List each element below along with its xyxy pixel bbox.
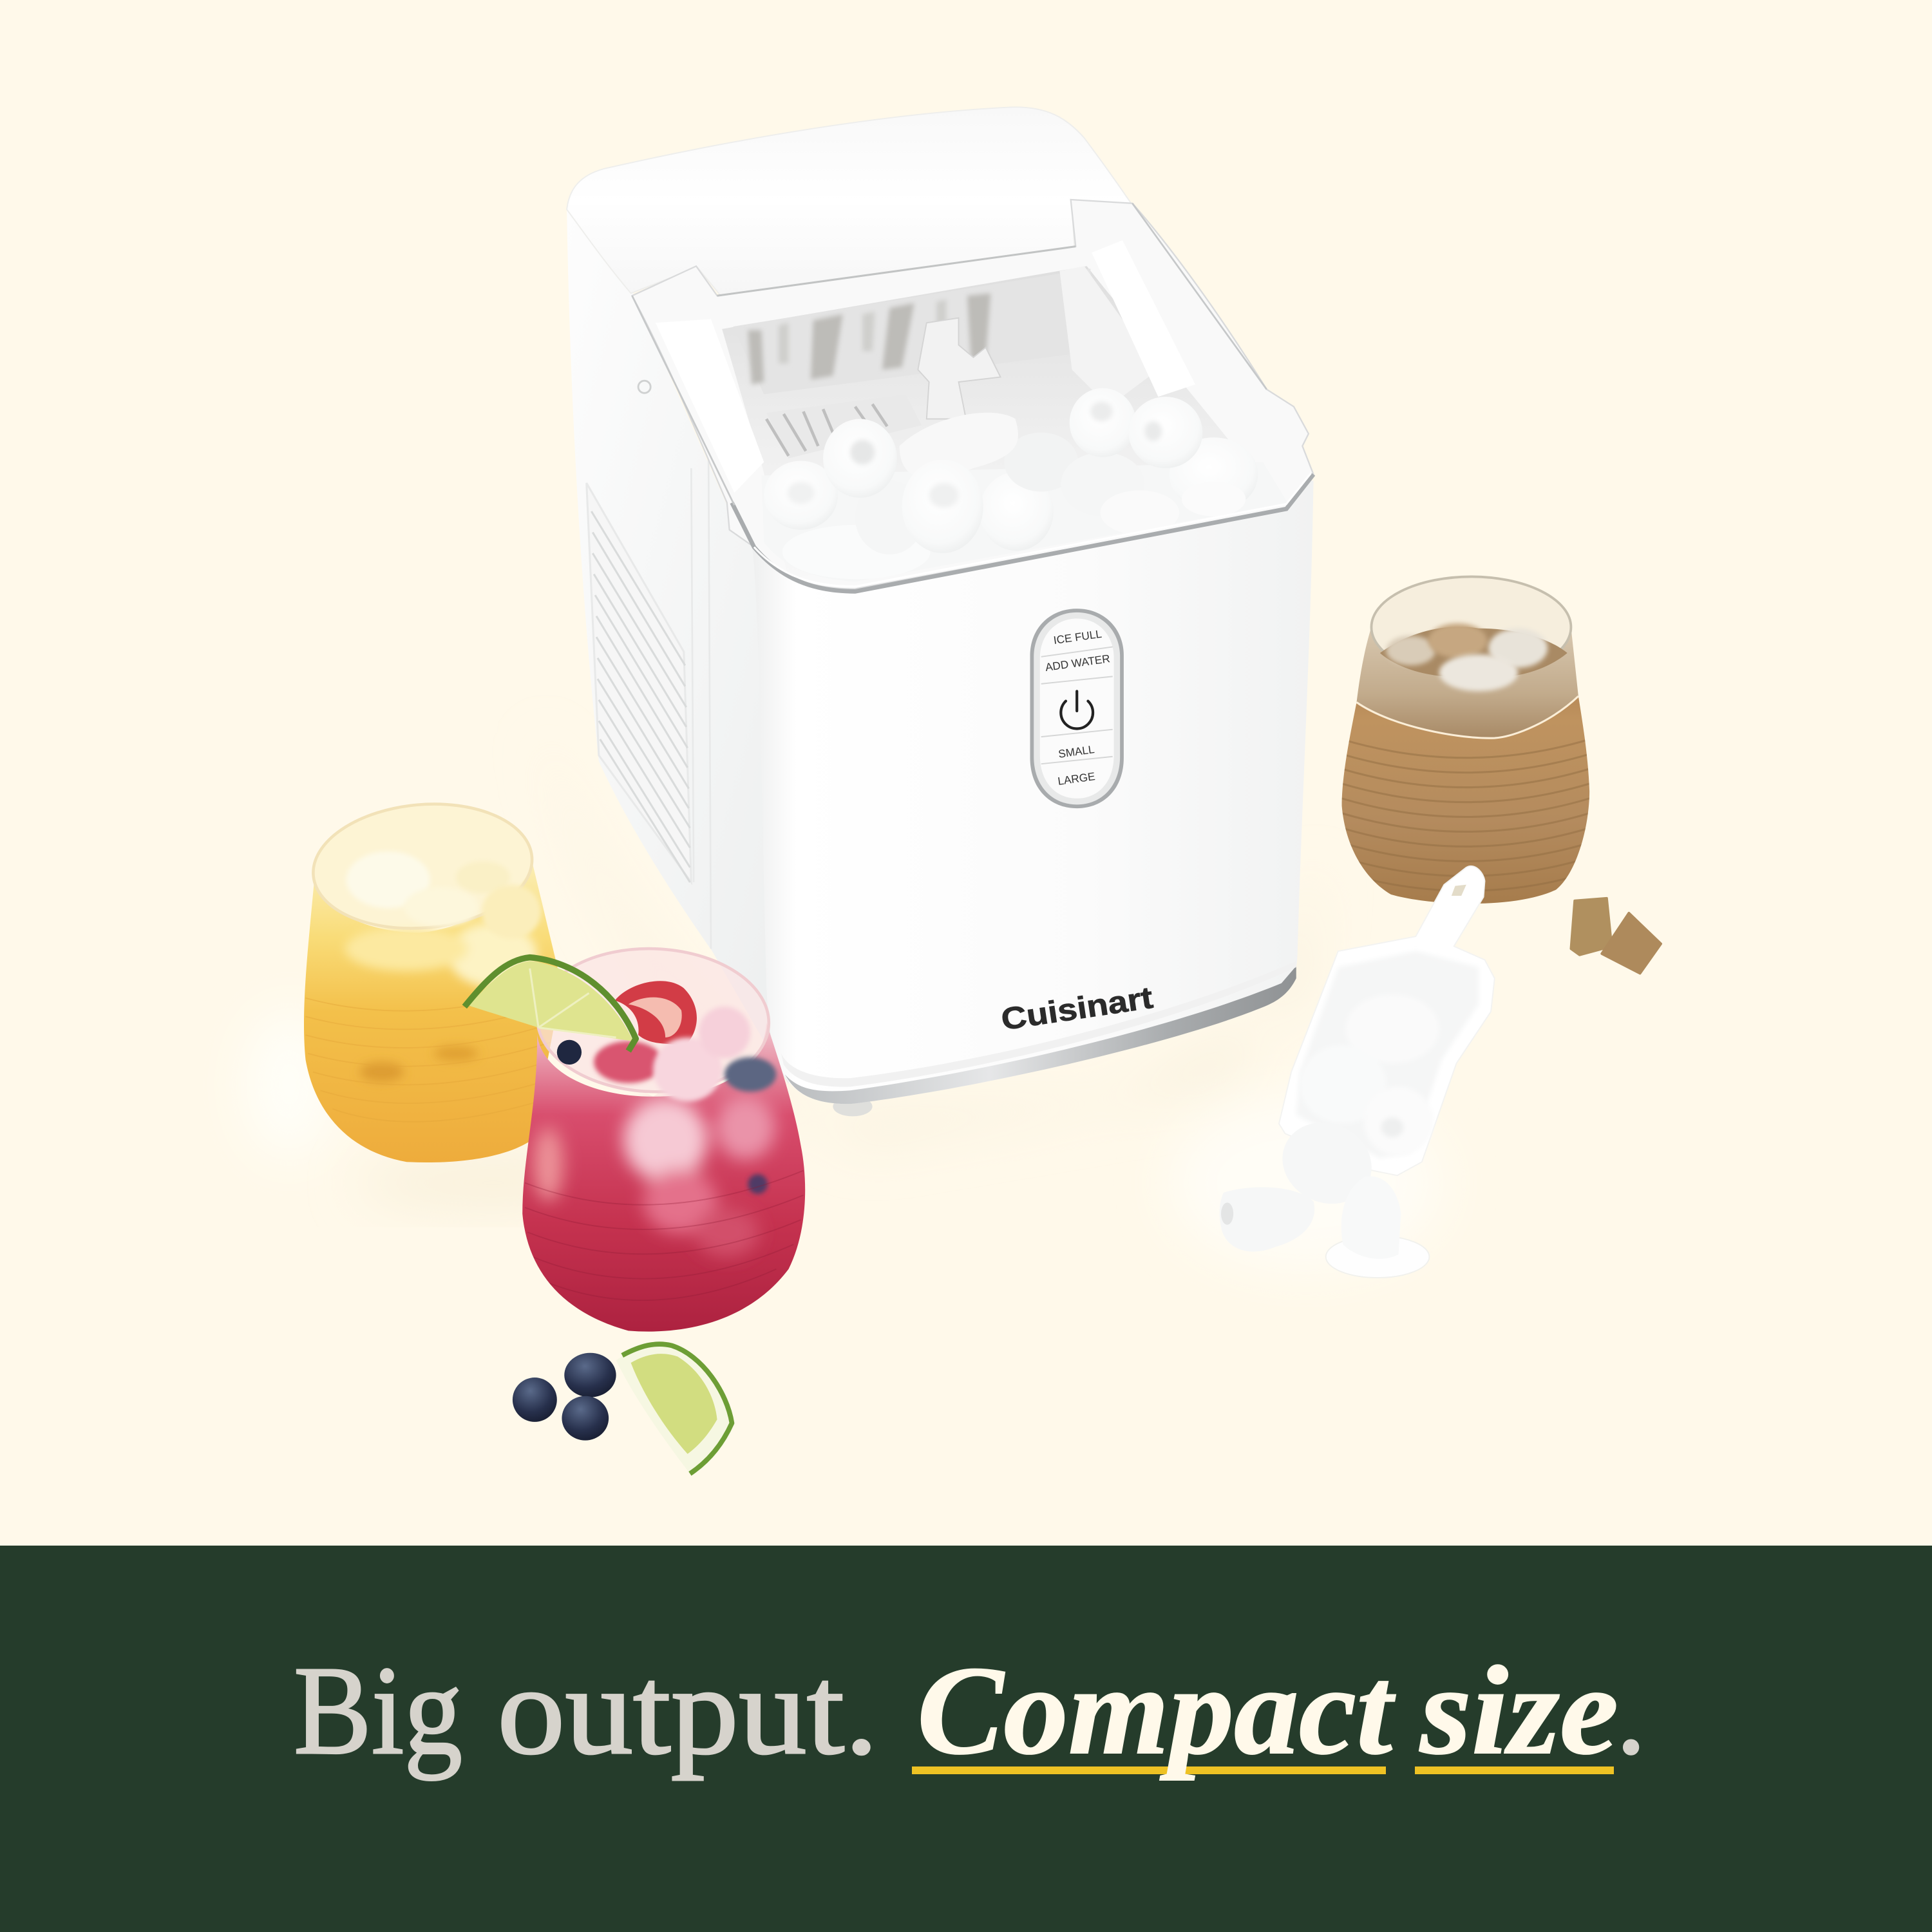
clear lid front lip [732,475,1314,591]
side small ring [638,381,650,393]
soft floor shadows [245,727,1442,1269]
underlines [912,1766,1614,1774]
brand logo: Cuisinart [999,981,1155,1037]
yellow glass [304,795,562,1162]
lime wedge [616,1344,732,1473]
product scene [245,107,1661,1473]
clear lid frame [632,200,1314,589]
strawberry [615,981,697,1047]
spilled ice cubes [1220,1108,1429,1278]
ice scoop [1279,866,1495,1175]
ice maker [567,107,1314,1116]
lower silver band [785,966,1296,1104]
control panel: LARGE [1057,770,1096,788]
bottom banner [0,1546,1932,1932]
ice cubes in bin [761,388,1287,582]
icon: power [1061,691,1093,728]
interior hardware [733,266,1158,459]
headline: output. [497,1640,878,1781]
headline: Big [294,1640,462,1781]
headline: . [1615,1640,1647,1781]
sugar cubes [1571,898,1661,973]
side vents [587,483,691,882]
lime slice on rim [468,961,633,1041]
front body [752,480,1314,1104]
top lid [567,107,1131,296]
loose blueberries [513,1353,616,1441]
white lid strips [656,319,764,493]
control panel [1030,609,1124,808]
ice in red glass [594,1041,663,1083]
machine interior window [722,266,1265,579]
side panel [567,207,801,1084]
machine feet [833,1097,873,1116]
coffee glass [1342,576,1589,904]
control panel: ICE FULL [1052,627,1103,647]
background [0,0,1932,1546]
control panel: SMALL [1057,743,1095,761]
headline: size [1419,1640,1618,1781]
headline [294,1640,1647,1781]
control panel: ADD WATER [1045,652,1111,674]
red glass [464,945,805,1332]
headline: Compact [917,1640,1396,1781]
